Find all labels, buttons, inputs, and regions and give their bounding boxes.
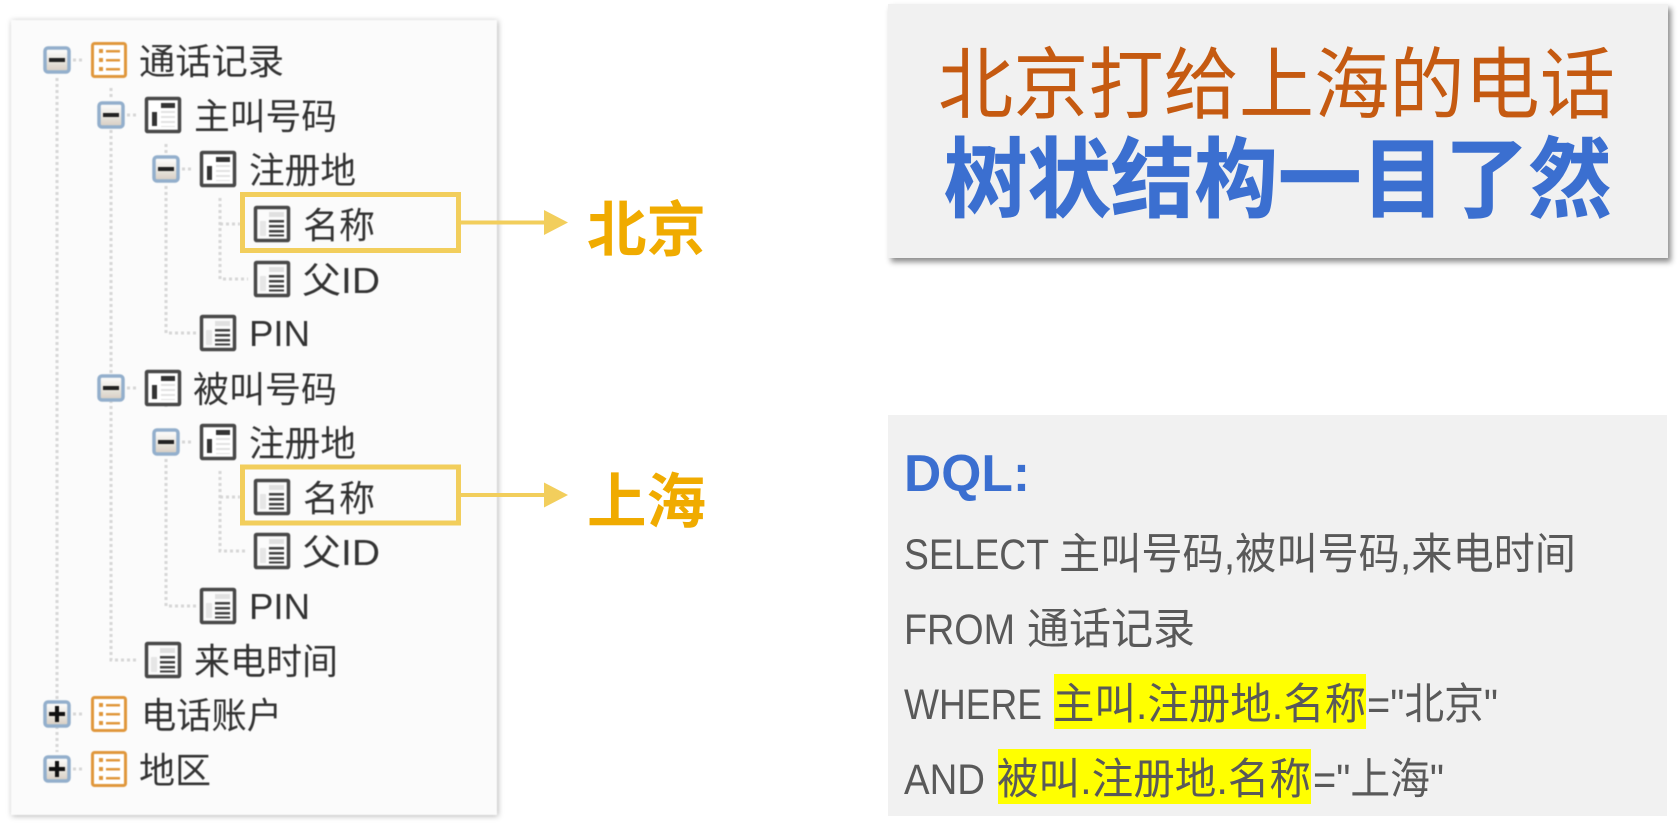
callout: called name highlight to 上海: [242, 467, 706, 536]
title line 1: 北京打给上海的电话: [938, 41, 1615, 129]
tree node: 名称: 名称: [303, 205, 375, 246]
tree node: 地区: 地区: [139, 750, 211, 791]
tree node: 父ID: [256, 260, 380, 301]
tree node: 名称 (called): 名称: [303, 478, 375, 519]
query line: FROM: 通话记录: [1027, 606, 1195, 654]
arrow: to 上海: [461, 482, 568, 508]
label: 上海: 上海: [587, 469, 706, 536]
title line 2: 树状结构一目了然: [944, 132, 1612, 229]
query line: SELECT: 主叫号码,被叫号码,来电时间: [1059, 531, 1576, 579]
tree panel background: [11, 20, 497, 815]
tree node: 主叫号码: [99, 96, 337, 137]
tree node: 注册地 (called): 注册地: [249, 423, 356, 464]
tree node: 通话记录: 通话记录: [139, 41, 284, 82]
query line: SELECT: SELECT: [904, 531, 1049, 579]
tree node: 来电时间: 来电时间: [194, 641, 338, 682]
title background: [888, 4, 1668, 258]
query line: AND: AND: [904, 756, 985, 804]
query line: FROM: FROM: [904, 606, 1015, 654]
tree node: 主叫号码: 主叫号码: [194, 96, 337, 137]
tree node: PIN (called): PIN: [249, 586, 310, 627]
tree node: 注册地: [154, 150, 356, 191]
query line: FROM: [904, 606, 1195, 654]
tree node: 电话账户: [45, 695, 282, 736]
tree node: 父ID (called): [256, 532, 380, 573]
label: 北京: 北京: [587, 197, 706, 264]
tree node: 被叫号码: [99, 369, 337, 410]
tree node: 被叫号码: 被叫号码: [193, 369, 337, 410]
tree node: 名称 (called): [256, 478, 375, 519]
query line: WHERE: WHERE: [904, 681, 1042, 729]
panel: title: [888, 4, 1668, 258]
tree node: PIN (called): [202, 586, 310, 627]
callout: caller name highlight to 北京: [242, 194, 706, 264]
query line: WHERE: ="北京": [1367, 681, 1498, 729]
DQL background: [888, 415, 1667, 816]
tree node: PIN: PIN: [249, 313, 310, 354]
tree connector lines: [57, 60, 248, 769]
yellow highlight: 主叫: [1054, 674, 1366, 729]
tree node: PIN: [202, 313, 310, 354]
tree node: 父ID: 父ID: [302, 260, 380, 301]
tree node: 通话记录: [45, 41, 284, 82]
panel: DQL query: [888, 415, 1667, 816]
tree node: 注册地: 注册地: [249, 150, 356, 191]
panel: tree structure: [11, 20, 497, 815]
tree node: 电话账户: 电话账户: [141, 695, 282, 736]
tree node: 父ID (called): 父ID: [302, 532, 380, 573]
arrow: to 北京: [461, 210, 568, 235]
tree node: 注册地 (called): [154, 423, 356, 464]
query line: AND: [904, 749, 1444, 804]
DQL heading: DQL:: [904, 445, 1030, 503]
tree node: 地区: [45, 750, 211, 791]
query line: WHERE: [904, 674, 1498, 729]
query line: AND: ="上海": [1313, 756, 1444, 804]
query line: AND: 被叫.注册地.名称: [997, 756, 1311, 804]
tree node: 名称: [256, 205, 375, 246]
yellow highlight: 被叫: [998, 749, 1311, 804]
query line: WHERE: 主叫.注册地.名称: [1053, 681, 1366, 729]
